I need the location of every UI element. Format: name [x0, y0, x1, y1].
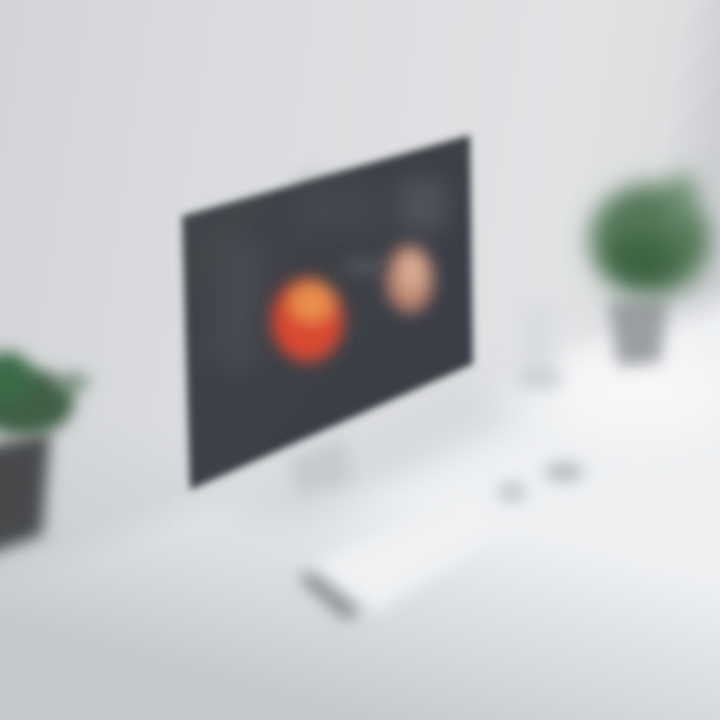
monitor shadow on desk — [200, 385, 530, 525]
glass on desk — [516, 300, 562, 390]
right plant pot — [608, 300, 668, 366]
connector between blobs — [345, 260, 383, 272]
left plant foliage — [0, 352, 90, 436]
right plant foliage — [590, 174, 710, 296]
pale chart blob — [386, 245, 434, 313]
keyboard — [298, 485, 515, 620]
monitor stand — [285, 437, 352, 495]
orange chart blob — [272, 278, 344, 362]
mouse and small objects — [498, 463, 584, 501]
monitor screen — [182, 135, 473, 490]
screen panels — [215, 180, 445, 370]
left plant pot — [0, 432, 50, 560]
